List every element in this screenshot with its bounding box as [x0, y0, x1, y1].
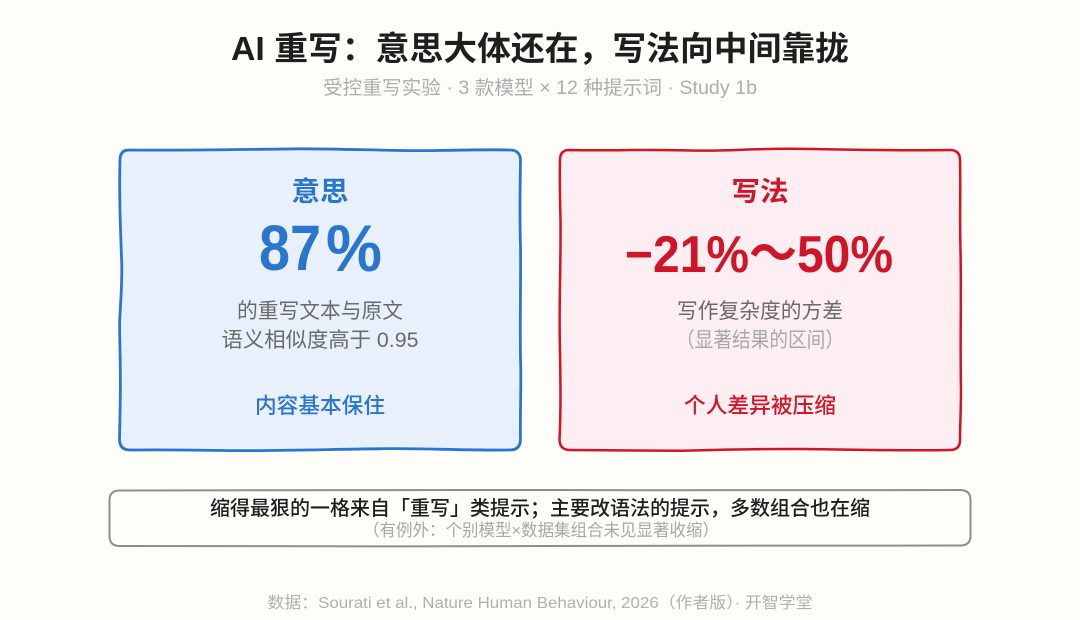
callout note: （有例外：个别模型×数据集组合未见显著收缩） — [363, 521, 719, 540]
callout border — [110, 490, 970, 546]
panel: meaning — [120, 149, 521, 451]
title: AI 重写：意思大体还在，写法向中间靠拢 — [231, 30, 849, 67]
panel border: meaning — [120, 149, 521, 451]
takeaway: meaning: 内容基本保住 — [255, 394, 385, 418]
stat: range: −21%～50% — [625, 226, 893, 284]
heading: writing style: 写法 — [732, 177, 788, 207]
heading: meaning: 意思 — [292, 177, 348, 207]
panel border: writing style — [560, 149, 961, 451]
panel: writing style — [560, 149, 961, 451]
description: meaning — [222, 300, 418, 352]
description: meaning: 的重写文本与原文 — [237, 300, 403, 323]
note: significant range: （显著结果的区间） — [676, 329, 844, 352]
callout main text: 缩得最狠的一格来自「重写」类提示；主要改语法的提示，多数组合也在缩 — [210, 497, 870, 520]
takeaway: writing style: 个人差异被压缩 — [684, 394, 836, 418]
source footer: 数据：Sourati et al., Nature Human Behaviour, 2026（作者版）· 开智学堂 — [268, 594, 812, 612]
stat: 87%: % — [326, 211, 382, 285]
stat: 87%: 87 — [259, 212, 321, 284]
callout — [110, 490, 970, 546]
description: writing style: 写作复杂度的方差 — [677, 300, 843, 323]
stat: 87% — [259, 211, 382, 285]
description: meaning: 语义相似度高于 0.95 — [222, 329, 418, 352]
subtitle: 受控重写实验 · 3 款模型 × 12 种提示词 · Study 1b — [323, 77, 757, 99]
